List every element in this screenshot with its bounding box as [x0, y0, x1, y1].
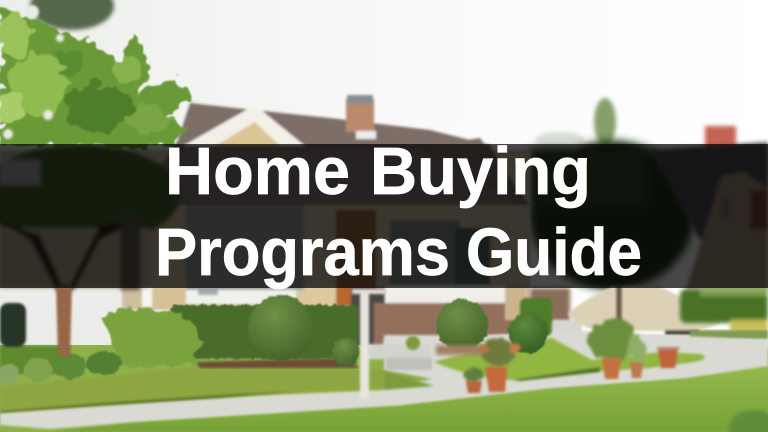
small lawn by steps	[384, 372, 434, 390]
title line 1: Buying	[370, 134, 591, 209]
leafy shrub	[102, 305, 205, 368]
terracotta potted plants	[464, 319, 679, 393]
dark shrub at wall	[0, 303, 26, 347]
house right	[650, 126, 768, 290]
side lawn left	[0, 346, 432, 413]
distant trees	[30, 0, 616, 148]
round shrubs right	[520, 298, 552, 336]
tree canopy behind band	[0, 145, 180, 290]
steps	[368, 344, 432, 370]
distant drive area	[530, 288, 570, 322]
title line 2: Guide	[466, 215, 642, 290]
title line 2: Programs	[155, 215, 450, 290]
dark tree behind band	[530, 140, 694, 290]
box hedge	[170, 305, 358, 359]
center lawn	[434, 338, 705, 381]
wall	[0, 150, 530, 310]
round shrub	[248, 295, 314, 361]
covered car	[568, 285, 720, 336]
title line 1: Home	[165, 134, 350, 209]
tree trunk	[56, 285, 72, 356]
title line 1	[165, 134, 591, 209]
mulch bed	[195, 358, 360, 368]
lower facade	[385, 285, 525, 304]
low shrubs	[0, 351, 122, 384]
background hedge right	[680, 288, 768, 332]
sky gaps in foliage	[3, 5, 64, 139]
title line 2	[155, 215, 642, 290]
foreground lawn	[50, 366, 768, 432]
sign post	[352, 289, 386, 398]
shrubs and hedges	[0, 295, 552, 384]
white pillars and trim	[0, 288, 122, 354]
sky	[0, 0, 768, 300]
windows	[186, 205, 304, 290]
roofs	[140, 103, 520, 200]
gable	[183, 105, 305, 146]
ground base	[0, 345, 768, 432]
concrete pathway	[0, 330, 768, 429]
small round shrub	[332, 338, 360, 366]
foreground tree foliage	[0, 5, 192, 146]
title	[155, 134, 642, 290]
lower roof	[135, 150, 520, 205]
main house	[0, 95, 530, 354]
dark translucent title band	[0, 144, 768, 288]
